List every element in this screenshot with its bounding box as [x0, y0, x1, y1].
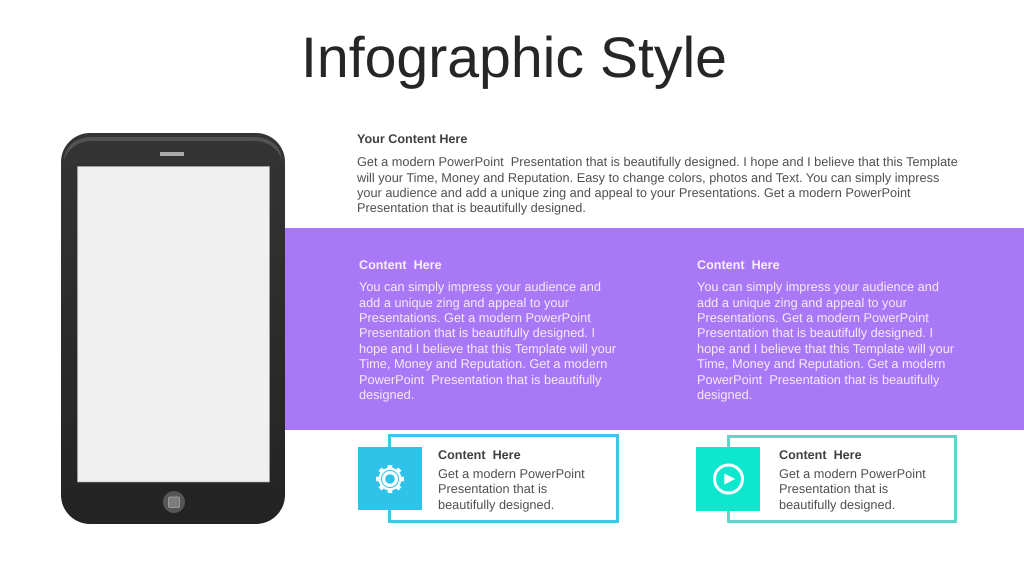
- icon: smartphone: [61, 133, 285, 524]
- phone body: [61, 133, 285, 524]
- card text: Content Here: [779, 448, 862, 462]
- card frame: [388, 434, 619, 523]
- icon: gear: [358, 447, 422, 510]
- top rim highlight: [64, 137, 282, 160]
- text block: purple left: Content Here: [359, 258, 442, 272]
- card text: Get a modern PowerPoint Presentation that is beautifully designed.: [438, 466, 585, 512]
- card: settings: [358, 434, 619, 523]
- text block: intro: Get a modern PowerPoint Presentation that is beautifully designed. I hope and I believe that this Template will your Time, Money and Reputation. Easy to change colors, photos and Text. You can simply impress your audience and add a unique zing and appeal to your Presentations. Get a modern PowerPoint Presentation that is beautifully designed.: [357, 154, 958, 215]
- purple band: [285, 228, 1024, 430]
- card frame: [727, 435, 957, 523]
- speaker: [160, 152, 184, 156]
- home button: [163, 491, 185, 513]
- text block: intro: Your Content Here: [357, 132, 467, 146]
- screen: [78, 166, 270, 482]
- text block: purple left: You can simply impress your audience and add a unique zing and appeal to your Presentations. Get a modern PowerPoint Presentation that is beautifully designed. I hope and I believe that this Template will your Time, Money and Reputation. Get a modern PowerPoint Presentation that is beautifully designed.: [359, 279, 616, 402]
- card text: Get a modern PowerPoint Presentation that is beautifully designed.: [779, 466, 926, 512]
- text block: purple right: You can simply impress your audience and add a unique zing and appeal to your Presentations. Get a modern PowerPoint Presentation that is beautifully designed. I hope and I believe that this Template will your Time, Money and Reputation. Get a modern PowerPoint Presentation that is beautifully designed.: [697, 279, 954, 402]
- icon: play: [696, 447, 760, 511]
- card: play: [696, 435, 957, 523]
- text block: purple right: Content Here: [697, 258, 780, 272]
- title: Infographic Style: [301, 26, 727, 90]
- card text: Content Here: [438, 448, 521, 462]
